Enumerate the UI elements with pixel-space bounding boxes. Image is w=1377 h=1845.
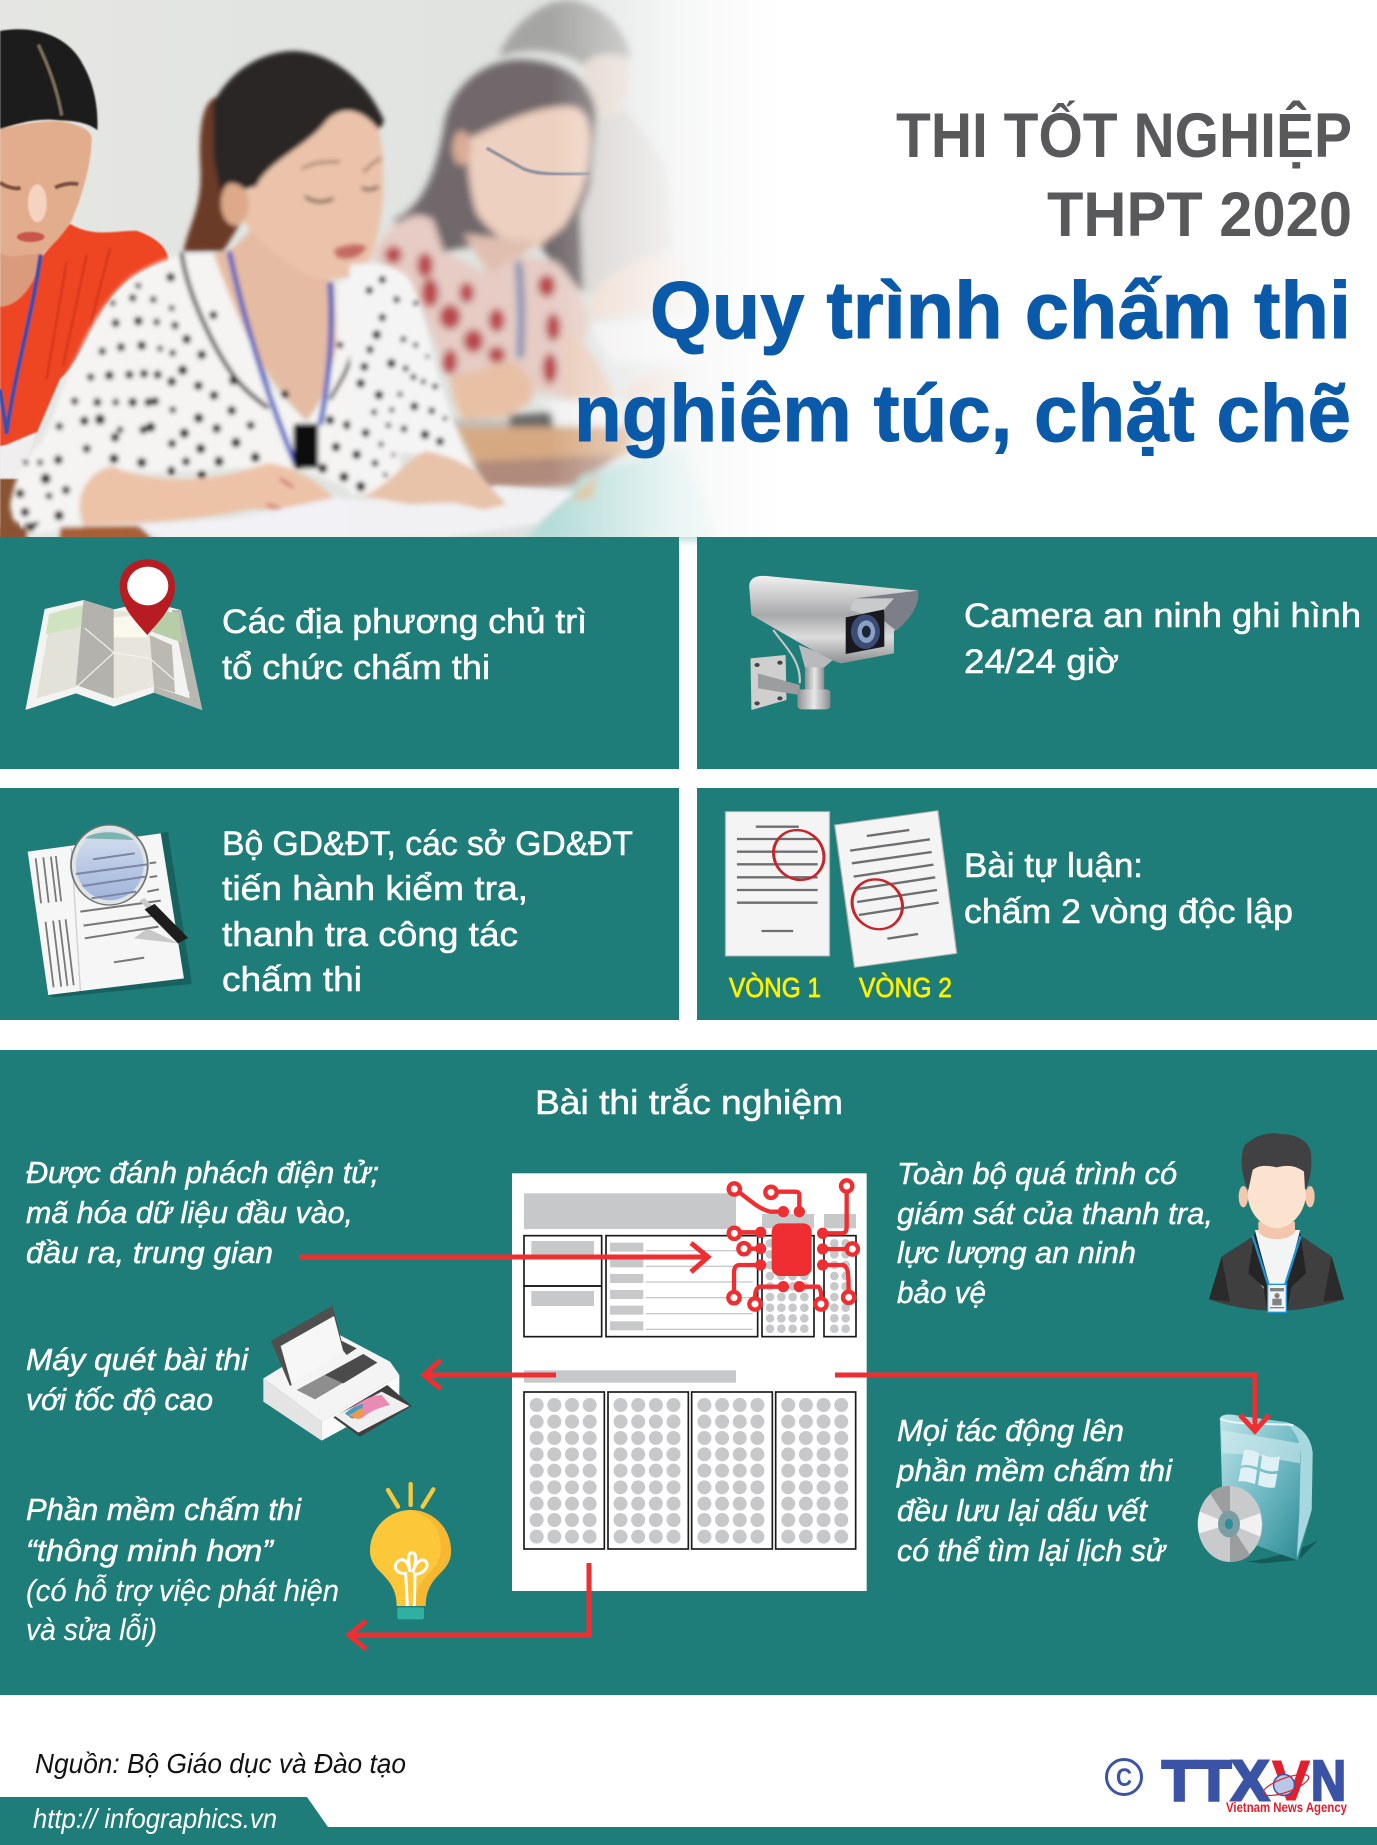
section heading: Bài thi trắc nghiệm [535,1084,843,1122]
icon: security camera [749,576,918,710]
arrow: to chip [299,1243,708,1272]
panel text: tiến hành kiểm tra, [222,870,528,908]
footer bar with website: http:// infographics.vn [33,1803,277,1834]
panel text: Bài tự luận: [964,847,1143,885]
centre woman in polka dot blouse [0,51,573,541]
text: supervision: bảo vệ [897,1275,986,1310]
icon: inspector with lanyard [1209,1133,1344,1312]
text: software traces: phần mềm chấm thi [896,1453,1173,1488]
text: high speed scanner [26,1342,249,1417]
text: software traces: Mọi tác động lên [897,1413,1124,1448]
panel text [964,597,1361,681]
arrow: to software box [835,1375,1269,1431]
logo: TTXVN: C [1116,1764,1132,1792]
text: high speed scanner: Máy quét bài thi [26,1342,249,1377]
icon: two marked essay papers [726,811,957,967]
text: smarter software: Phần mềm chấm thi [26,1492,302,1527]
panel text: Các địa phương chủ trì [222,603,587,641]
header photo: exam markers at desks [0,0,810,541]
answer sheet with chip [512,1173,867,1591]
panel text [222,603,587,687]
glasses on back woman [487,148,590,174]
panel: multiple-choice grading [0,1050,1377,1695]
panel: ministry inspection [0,788,679,1020]
logo: TTXVN: N [1311,1749,1346,1813]
panel text: thanh tra công tác [222,916,518,954]
panel: security camera [697,537,1377,769]
icon: map with pin [25,559,202,710]
arrow: to scanner [424,1360,556,1389]
text: supervision: giám sát của thanh tra, [897,1196,1213,1231]
text: software traces: có thể tìm lại lịch sử [897,1533,1167,1568]
panel text: 24/24 giờ [964,643,1119,681]
icon: scanner printer [263,1306,412,1441]
arrow: to light bulb [349,1563,589,1649]
panel: essay grading [697,788,1377,1020]
source note: Nguồn: Bộ Giáo dục và Đào tạo [35,1748,406,1779]
icon: light bulb [370,1484,451,1619]
panel text: chấm 2 vòng độc lập [964,893,1293,931]
text: high speed scanner: với tốc độ cao [26,1382,213,1417]
panel text: tổ chức chấm thi [222,649,490,687]
left woman in red [0,29,168,541]
text: electronic coding: mã hóa dữ liệu đầu vào, [26,1195,353,1230]
panel: local organisation [0,537,679,769]
panel text: Camera an ninh ghi hình [964,597,1361,635]
icon: software box and disc [1198,1415,1318,1563]
footer bar with website [0,1797,1377,1845]
panel text [964,847,1293,931]
panel text: chấm thi [222,961,362,999]
text: supervision [897,1156,1213,1310]
icon: document with magnifying glass [28,825,192,997]
text: electronic coding: đầu ra, trung gian [26,1235,273,1270]
panel text: Bộ GD&ĐT, các sở GD&ĐT [222,825,633,863]
title line 2: THPT 2020 [1047,180,1352,250]
logo: TTXVN [1106,1749,1347,1815]
back row women [370,0,717,541]
text: smarter software [26,1492,339,1647]
title block [574,100,1352,459]
logo: TTXVN: Vietnam News Agency [1226,1799,1347,1815]
subtitle line 2: nghiêm túc, chặt chẽ [574,369,1351,459]
label: round 2: VÒNG 2 [859,972,952,1003]
text: supervision: Toàn bộ quá trình có [897,1156,1177,1191]
text: smarter software: (có hỗ trợ việc phát hiện [26,1573,339,1608]
icon: red microchip [728,1180,858,1310]
panel text [222,825,633,999]
logo: TTXVN: TTX [1162,1749,1269,1813]
text: electronic coding: Được đánh phách điện tử; [26,1155,379,1190]
text: smarter software: và sửa lỗi) [26,1612,157,1647]
text: supervision: lực lượng an ninh [897,1235,1136,1270]
subtitle line 1: Quy trình chấm thi [650,266,1351,356]
text: electronic coding [26,1155,379,1270]
text: smarter software: “thông minh hơn” [26,1533,275,1568]
label: round 1: VÒNG 1 [729,972,821,1003]
text: software traces [896,1413,1173,1568]
text: software traces: đều lưu lại dấu vết [897,1493,1148,1528]
logo: TTXVN: V [1272,1749,1310,1813]
